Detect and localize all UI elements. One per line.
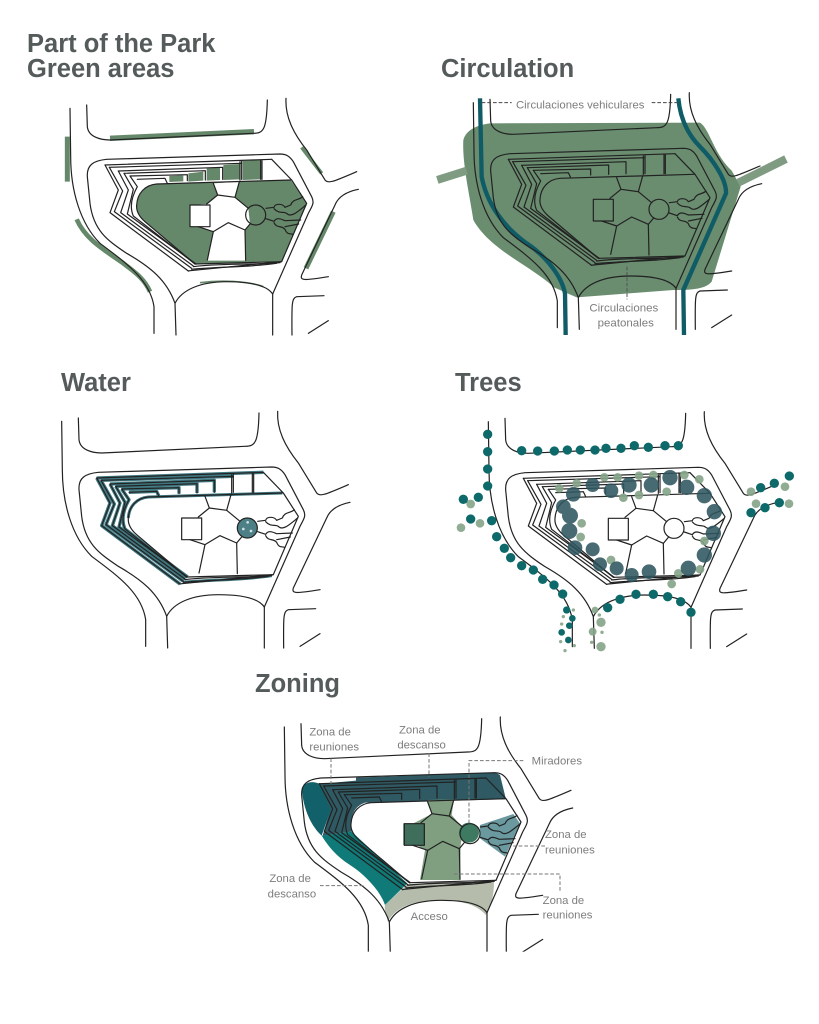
green pedestrian area bbox=[463, 123, 741, 297]
pedestrian connectors bbox=[437, 159, 786, 183]
zone: acceso bbox=[385, 882, 494, 922]
site plan linework bbox=[488, 412, 777, 648]
label: zona de reuniones lower: reuniones bbox=[543, 910, 593, 922]
label: miradores: Miradores bbox=[532, 755, 582, 767]
vehicular roads bbox=[480, 98, 726, 335]
label: zona de reuniones top: Zona de bbox=[309, 726, 351, 738]
zone: circle mirador bbox=[459, 823, 479, 843]
dashed leaders bbox=[320, 753, 560, 892]
zone: channels bbox=[480, 814, 520, 857]
title: Part of the Park, Green areas: Green areas bbox=[27, 55, 174, 83]
title: Zoning: Zoning bbox=[255, 670, 340, 698]
callout: circulaciones peatonales: peatonales bbox=[598, 317, 654, 329]
panel: trees map bbox=[457, 412, 794, 652]
plaza cut-out bbox=[190, 182, 250, 261]
site plan linework bbox=[70, 98, 358, 335]
site plan linework bbox=[473, 93, 762, 329]
water channels on terraces bbox=[97, 472, 282, 584]
label: zona de reuniones lower: Zona de bbox=[543, 895, 584, 907]
label: acceso: Acceso bbox=[411, 911, 448, 923]
zone: upper terraces bbox=[318, 772, 506, 836]
title: Trees: Trees bbox=[455, 369, 522, 397]
title: Part of the Park, Green areas: Part of the Park bbox=[27, 30, 215, 58]
label: zona de descanso left: Zona de bbox=[269, 873, 311, 885]
label: zona de reuniones right: Zona de bbox=[545, 829, 587, 841]
zone: left dark teal bbox=[302, 782, 331, 836]
label: zona de reuniones right: reuniones bbox=[545, 844, 595, 856]
panel: circulation map bbox=[437, 93, 786, 335]
title: Circulation: Circulation bbox=[441, 55, 574, 83]
title: Water: Water bbox=[61, 369, 131, 397]
label: zona de descanso top: Zona de bbox=[399, 724, 441, 736]
terrace green strips bbox=[169, 160, 261, 182]
callout: circulaciones vehiculares: Circulaciones vehiculares bbox=[516, 99, 645, 111]
zone: central plaza bbox=[413, 799, 463, 880]
white cover below map crop bbox=[350, 952, 550, 962]
street trees bbox=[459, 430, 794, 643]
label: zona de descanso left: descanso bbox=[268, 888, 316, 900]
zone: square bbox=[403, 823, 425, 845]
panel: water map bbox=[62, 411, 350, 648]
zone: lower teal bbox=[322, 832, 407, 905]
site plan linework bbox=[284, 717, 573, 954]
callout: circulaciones peatonales: Circulaciones bbox=[589, 303, 659, 315]
label: zona de reuniones top: reuniones bbox=[309, 742, 359, 754]
sage trees bbox=[457, 471, 793, 652]
street edge greenery bbox=[67, 132, 333, 292]
green park lawn bbox=[137, 180, 307, 264]
callout: circulaciones peatonales bbox=[589, 267, 659, 329]
label: zona de descanso top: descanso bbox=[397, 740, 446, 752]
panel: zoning map bbox=[268, 717, 595, 962]
large dark trees bbox=[556, 470, 722, 582]
panel: green areas map bbox=[67, 98, 358, 335]
site plan linework bbox=[62, 411, 350, 648]
